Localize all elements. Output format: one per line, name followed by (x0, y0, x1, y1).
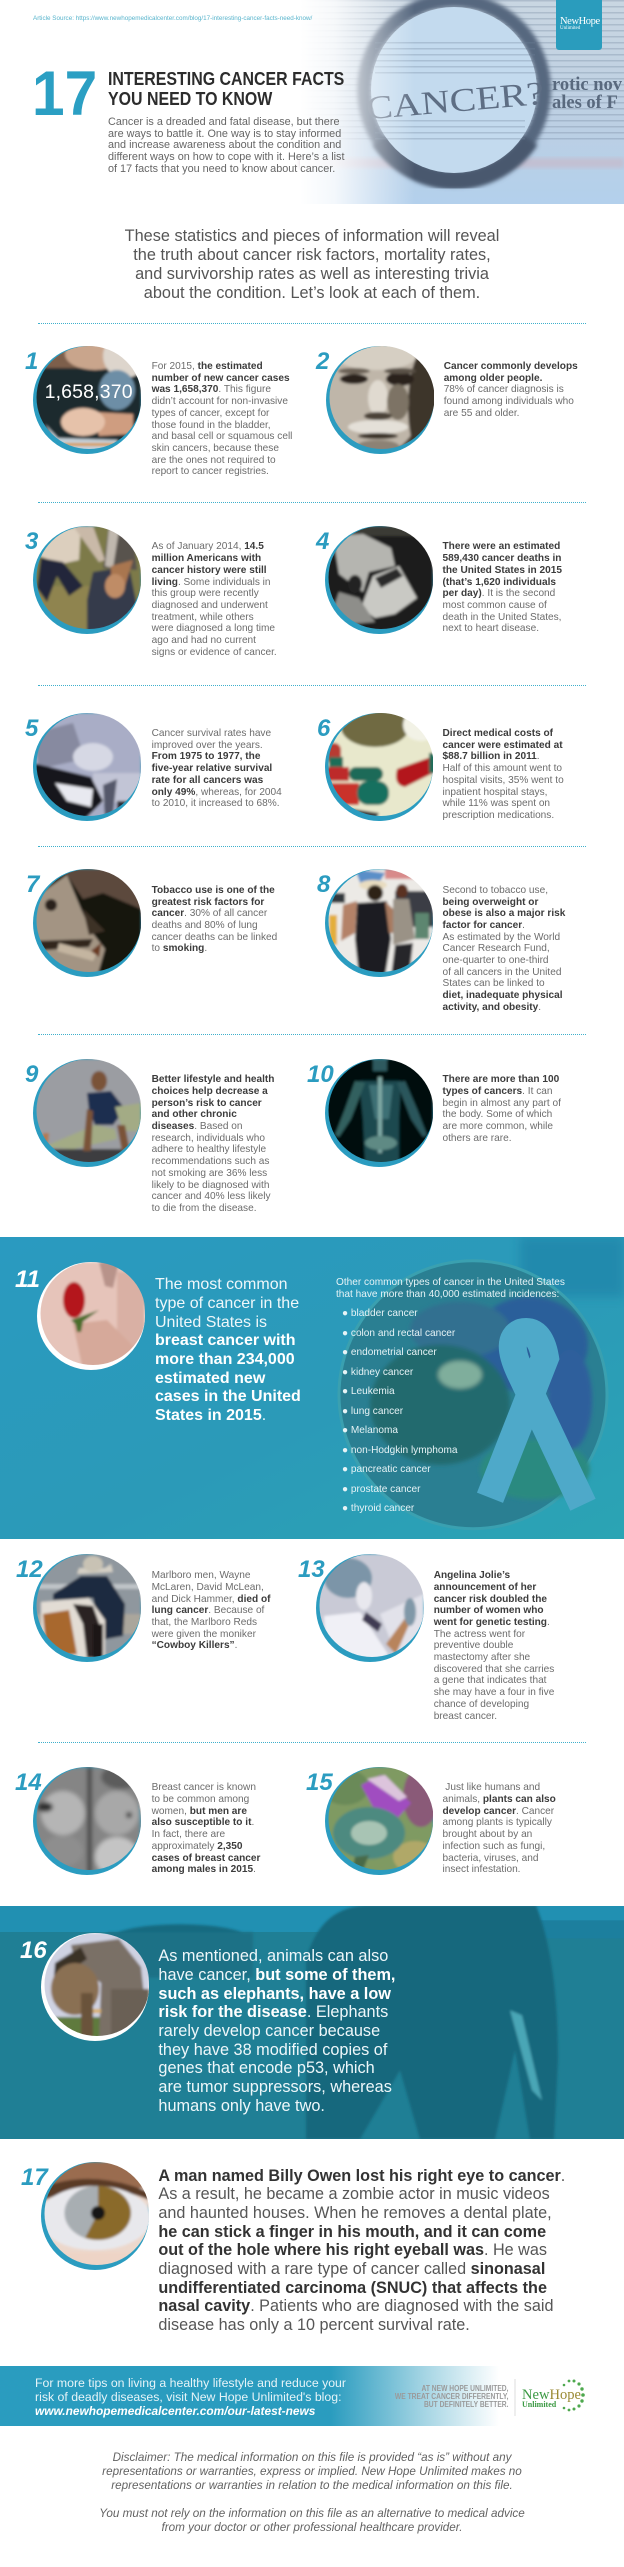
text 9: choices help decrease a (152, 1086, 268, 1097)
text 16: As mentioned, animals can also (158, 1947, 388, 1965)
text 12: and Dick Hammer, died of (152, 1594, 271, 1604)
title: INTERESTING CANCER FACTS (108, 69, 344, 89)
text 13: breast cancer. (434, 1711, 497, 1722)
number 9: 9 (25, 1061, 38, 1088)
number 13: 13 (298, 1556, 325, 1583)
text 5: From 1975 to 1977, the (152, 751, 260, 762)
text 12 (152, 1570, 271, 1651)
blog text (35, 2376, 346, 2418)
text 13: announcement of her (434, 1582, 536, 1593)
text 14: approximately 2,350 (152, 1841, 242, 1852)
photo: rose (37, 1262, 145, 1370)
text 6 (442, 728, 564, 821)
text 1: are the ones not required to (152, 455, 276, 466)
text 11: more than 234,000 (155, 1351, 295, 1368)
separator and logo (514, 2379, 585, 2416)
text 4: 589,430 cancer deaths in (442, 553, 561, 564)
text 4: most common cause of (442, 600, 547, 611)
list intro: Other common types of cancer in the United States (336, 1277, 565, 1288)
text 13: went for genetic testing. (434, 1617, 550, 1628)
text 13: discovered that she carries (434, 1664, 554, 1675)
text 4: There were an estimated (442, 541, 560, 552)
text 9: Better lifestyle and health (152, 1074, 274, 1085)
text 3 (152, 541, 277, 658)
fact 13 (298, 1554, 554, 1722)
text 16: have cancer, but some of them, (158, 1966, 395, 1984)
text 2: are 55 and older. (444, 408, 519, 419)
text 8: one-quarter to one-third (442, 955, 549, 966)
banner background with ribbon (0, 1237, 624, 1539)
text 15: animals, plants can also (442, 1794, 556, 1805)
text 14: cases of breast cancer (152, 1853, 260, 1864)
number 7: 7 (26, 871, 39, 898)
lead paragraph: and survivorship rates as well as interesting trivia (135, 265, 489, 283)
text 12: that, the Marlboro Reds (152, 1617, 257, 1628)
lead paragraph: about the condition. Let’s look at each of them. (144, 284, 480, 302)
photo: skeleton (325, 1059, 433, 1167)
text 8: Second to tobacco use, (442, 885, 548, 896)
text 16: such as elephants, have a low (158, 1985, 391, 2003)
text 17 (158, 2167, 565, 2334)
text 15: Just like humans and (445, 1782, 540, 1793)
fact 12 (16, 1554, 271, 1662)
intro text: Cancer is a dreaded and fatal disease, but there (108, 116, 339, 128)
text 7: deaths and 80% of lung (152, 920, 258, 931)
text 2: Cancer commonly develops (444, 361, 578, 372)
text 15: among plants is typically (442, 1817, 552, 1828)
tagline: AT NEW HOPE UNLIMITED, (421, 2383, 508, 2393)
disclaimer: You must not rely on the information on this file as an alternative to medical advice (99, 2507, 525, 2520)
disclaimer: Disclaimer: The medical information on this file is provided “as is” without any (113, 2451, 511, 2464)
text 8: of all cancers in the United (442, 967, 561, 978)
text 1: For 2015, the estimated (152, 361, 263, 372)
text 15 (442, 1782, 556, 1875)
number 8: 8 (317, 871, 330, 898)
text 1: didn’t account for non-invasive (152, 396, 288, 407)
lead paragraph: the truth about cancer risk factors, mortality rates, (133, 246, 491, 264)
header: magnifying glass photo: ales of F (552, 93, 618, 113)
big number 17: 17 (32, 59, 97, 129)
text 2: 78% of cancer diagnosis is (444, 384, 564, 395)
list of cancers: ● Leukemia (342, 1386, 395, 1397)
photo: people walking (325, 869, 433, 977)
text 7: Tobacco use is one of the (152, 885, 275, 896)
text 13: Angelina Jolie’s (434, 1570, 510, 1581)
text 14: to be common among (152, 1794, 249, 1805)
text 11: type of cancer in the (155, 1295, 299, 1312)
header: magnifying glass photo: CANCER? (365, 76, 545, 127)
text 12: were given the moniker (152, 1629, 256, 1640)
fact 4 (316, 526, 562, 634)
text 15: bacteria, viruses, and (442, 1853, 538, 1864)
blog text: For more tips on living a healthy lifestyle and reduce your (35, 2376, 346, 2390)
text 10: There are more than 100 (442, 1074, 559, 1085)
photo: wheelchair (33, 713, 141, 821)
text 6: cancer were estimated at (442, 740, 563, 751)
text 14: In fact, there are (152, 1829, 225, 1840)
text 6: prescription medications. (442, 810, 554, 821)
text 13: mastectomy after she (434, 1652, 530, 1663)
separator and logo: NewHope (522, 2387, 581, 2403)
text 13: cancer risk doubled the (434, 1594, 547, 1604)
text 2: among older people. (444, 373, 542, 384)
text 9: adhere to healthy lifestyle (152, 1144, 266, 1155)
photo: cowboy (33, 1554, 141, 1662)
text 6: inpatient hospital stays, (442, 787, 547, 798)
text 11: estimated new (155, 1370, 265, 1387)
text 12: lung cancer. Because of (152, 1605, 264, 1616)
text 1: report to cancer registries. (152, 466, 269, 477)
text 17: undifferentiated carcinoma (SNUC) that affects the (158, 2279, 547, 2297)
text 17: disease has only a 10 percent survival rate. (158, 2316, 470, 2334)
text 6: $88.7 billion in 2011. (442, 751, 540, 762)
number 14: 14 (15, 1769, 42, 1796)
text 1: skin cancers, because these (152, 443, 279, 454)
text 8: As estimated by the World (442, 932, 560, 943)
text 3: million Americans with (152, 553, 261, 564)
text 16: humans only have two. (158, 2097, 325, 2115)
photo: male chest (33, 1767, 141, 1875)
text 13: chance of developing (434, 1699, 529, 1710)
text 15: infection such as fungi, (442, 1841, 545, 1852)
fact 14 (15, 1767, 260, 1875)
list of cancers: ● prostate cancer (342, 1484, 420, 1495)
text 14: women, but men are (152, 1806, 247, 1817)
panel: fact 16 banner (0, 1906, 624, 2139)
text 9: to die from the disease. (152, 1203, 257, 1214)
text 3: signs or evidence of cancer. (152, 647, 277, 658)
text 9: diseases. Based on (152, 1121, 243, 1132)
text 16: genes that encode p53, which (158, 2059, 375, 2077)
text 7: to smoking. (152, 943, 207, 954)
text 16: are tumor suppressors, whereas (158, 2078, 392, 2096)
photo: old man (326, 346, 434, 454)
text 14: also susceptible to it. (152, 1817, 254, 1828)
tagline: WE TREAT CANCER DIFFERENTLY, (395, 2391, 508, 2401)
text 16: they have 38 modified copies of (158, 2041, 387, 2059)
disclaimer (99, 2451, 525, 2534)
text 14: Breast cancer is known (152, 1782, 256, 1793)
number 17 small: 17 (21, 2164, 48, 2191)
text 4: per day). It is the second (442, 588, 555, 599)
number 2: 2 (316, 348, 329, 375)
photo: pills (325, 713, 433, 821)
text 8: factor for cancer. (442, 920, 525, 931)
list of cancers: ● Melanoma (342, 1425, 398, 1436)
text 9: research, individuals who (152, 1133, 265, 1144)
list of cancers: ● kidney cancer (342, 1367, 413, 1378)
text 5: five-year relative survival (152, 763, 272, 774)
list intro (336, 1277, 565, 1300)
list of cancers: ● endometrial cancer (342, 1347, 437, 1358)
number 15: 15 (306, 1769, 333, 1796)
text 1: those found in the bladder, (152, 420, 271, 431)
list of cancers: ● thyroid cancer (342, 1503, 414, 1514)
separator and logo: Unlimited (522, 2400, 557, 2409)
text 10: others are rare. (442, 1133, 512, 1144)
text 17: out of the hole where his right eyeball was. He was (158, 2241, 547, 2259)
photo: man stretching (33, 1059, 141, 1167)
text 8: obese is also a major risk (442, 908, 565, 919)
text 17: and haunted houses. When he removes a dental plate, (158, 2204, 552, 2222)
text 9: and other chronic (152, 1109, 237, 1120)
text 1: number of new cancer cases (152, 373, 290, 384)
text 10: begin in almost any part of (442, 1098, 561, 1109)
text 7: cancer deaths can be linked (152, 932, 277, 943)
text 4 (442, 541, 562, 634)
lead paragraph: These statistics and pieces of information will reveal (125, 227, 499, 245)
text 10: the body. Some of which (442, 1109, 552, 1120)
text 1: was 1,658,370. This figure (152, 384, 271, 395)
text 8: Cancer Research Fund, (442, 943, 550, 954)
fact 1 (25, 346, 292, 477)
list of cancers: ● lung cancer (342, 1406, 403, 1417)
text 3: diagnosed and underwent (152, 600, 268, 611)
text 17: As a result, he became a zombie actor in music videos (158, 2185, 550, 2203)
list of cancers: ● pancreatic cancer (342, 1464, 431, 1475)
text 11: The most common (155, 1276, 287, 1293)
text 6: Half of this amount went to (442, 763, 562, 774)
text 1 (152, 361, 292, 477)
text 2 (444, 361, 578, 419)
number 12: 12 (16, 1556, 43, 1583)
fact 17 (21, 2162, 565, 2334)
number 11: 11 (15, 1266, 40, 1293)
disclaimer: representations or warranties in relation to the medical information on this file. (111, 2479, 513, 2492)
logo badge (556, 0, 602, 50)
photo: thistle (325, 1767, 433, 1875)
fact 7 (26, 869, 277, 977)
text 6: hospital visits, 35% went to (442, 775, 564, 786)
fact 3 (25, 526, 277, 658)
title (108, 69, 344, 109)
logo badge: Unlimited (560, 26, 580, 31)
text 17: nasal cavity. Patients who are diagnosed with the said (158, 2297, 553, 2315)
text 5: Cancer survival rates have (152, 728, 271, 739)
text 3: living. Some individuals in (152, 576, 271, 588)
number 1: 1 (25, 348, 38, 375)
intro text: and increase awareness about the condition and (108, 139, 341, 151)
intro text: of 17 facts that you need to know about cancer. (108, 163, 335, 175)
photo: eye (41, 2162, 149, 2270)
text 11: United States is (155, 1314, 267, 1331)
text 3: cancer history were still (152, 565, 267, 576)
intro text: are ways to battle it. One way is to stay informed (108, 128, 341, 140)
lead paragraph (125, 227, 499, 302)
blog text: risk of deadly diseases, visit New Hope Unlimited's blog: (35, 2390, 342, 2404)
fact 10 (307, 1059, 561, 1167)
text 13: she may have a four in five (434, 1687, 554, 1698)
list of cancers (342, 1308, 458, 1514)
fact 2 (316, 346, 578, 454)
text 12: Marlboro men, Wayne (152, 1570, 251, 1581)
text 7: cancer. 30% of all cancer (152, 908, 267, 919)
text 11: States in 2015. (155, 1407, 266, 1424)
text 4: next to heart disease. (442, 623, 539, 634)
title: YOU NEED TO KNOW (108, 89, 272, 109)
call to action bar (0, 2366, 585, 2426)
number 6: 6 (317, 715, 330, 742)
text 17: A man named Billy Owen lost his right eye to cancer. (158, 2167, 565, 2185)
list intro: that have more than 40,000 estimated incidences: (336, 1289, 559, 1300)
text 9 (152, 1074, 274, 1214)
text 4: death in the United States, (442, 612, 561, 623)
text 5: only 49%, whereas, for 2004 (152, 787, 282, 798)
fact 15 (306, 1767, 556, 1875)
disclaimer: representations or warranties, express or implied. New Hope Unlimited makes no (102, 2465, 522, 2478)
text 6: while 11% was spent on (442, 798, 550, 809)
text 4: (that’s 1,620 individuals (442, 576, 556, 588)
text 9: recommendations such as (152, 1156, 269, 1167)
number 10: 10 (307, 1061, 334, 1088)
text 8: activity, and obesity. (442, 1002, 541, 1013)
text 13: a gene that indicates that (434, 1675, 546, 1686)
list of cancers: ● colon and rectal cancer (342, 1328, 455, 1339)
text 7: greatest risk factors for (152, 896, 264, 908)
list of cancers: ● non-Hodgkin lymphoma (342, 1445, 458, 1456)
text 3: As of January 2014, 14.5 (152, 541, 264, 552)
text 1: and basal cell or squamous cell (152, 431, 292, 442)
text 16 (158, 1947, 395, 2115)
panel: fact 11 banner (0, 1237, 624, 1539)
photo: elephants (41, 1933, 149, 2041)
text 11: cases in the United (155, 1388, 301, 1405)
text 17: he can stick a finger in his mouth, and it can come (158, 2223, 546, 2241)
text 9: likely to be diagnosed with (152, 1180, 269, 1191)
text 9: cancer and 40% less likely (152, 1191, 271, 1202)
number 5: 5 (25, 715, 38, 742)
text 14 (152, 1782, 260, 1875)
text 4: the United States in 2015 (442, 565, 562, 576)
text 10 (442, 1074, 561, 1144)
header: magnifying glass photo (298, 0, 624, 204)
text 5 (152, 728, 282, 809)
article source: Article Source: https://www.newhopemedicalcenter.com/blog/17-interesting-cancer-facts-need-know/ (33, 15, 312, 22)
text 15: develop cancer. Cancer (442, 1806, 554, 1817)
tagline (394, 2383, 508, 2409)
text 3: this group were recently (152, 588, 259, 599)
text 5: rate for all cancers was (152, 775, 263, 786)
text 9: not smoking are 36% less (152, 1168, 267, 1179)
disclaimer: from your doctor or other professional healthcare provider. (162, 2521, 462, 2534)
text 1: types of cancer, except for (152, 408, 269, 419)
text 12: “Cowboy Killers”. (152, 1640, 237, 1651)
text 5: improved over the years. (152, 740, 263, 751)
text 6: Direct medical costs of (442, 728, 553, 739)
fact 5 (25, 713, 282, 821)
fact 8 (317, 869, 566, 1013)
text 15: insect infestation. (442, 1864, 520, 1875)
text 13: number of women who (434, 1605, 544, 1616)
text 8: States can be linked to (442, 978, 545, 989)
text 2: found among individuals who (444, 396, 574, 407)
text 13: The actress went for (434, 1629, 525, 1640)
number 4: 4 (316, 528, 329, 555)
text 16: rarely develop cancer because (158, 2022, 380, 2040)
fact 9 (25, 1059, 274, 1214)
text 3: were diagnosed a long time (152, 623, 275, 634)
text 8: being overweight or (442, 896, 538, 908)
text 13 (434, 1570, 554, 1722)
intro text: different ways on how to cope with it. Here’s a list (108, 151, 344, 163)
text 12: McLaren, David McLean, (152, 1582, 264, 1593)
list of cancers: ● bladder cancer (342, 1308, 418, 1319)
text 15: brought about by an (442, 1829, 532, 1840)
text 17: diagnosed with a rare type of cancer called sinonasal (158, 2260, 545, 2278)
text 10: types of cancers. It can (442, 1086, 552, 1097)
text 3: ago and had no current (152, 635, 256, 646)
text 11: breast cancer with (155, 1332, 296, 1349)
text 5: to 2010, it increased to 68%. (152, 798, 280, 809)
photo: skull (325, 526, 433, 634)
text 8: diet, inadequate physical (442, 990, 563, 1001)
photo: couple walking (33, 526, 141, 634)
text 10: are more common, while (442, 1121, 553, 1132)
text 16: risk for the disease. Elephants (158, 2003, 388, 2021)
intro text (108, 116, 344, 175)
text 13: preventive double (434, 1640, 513, 1651)
text 11 (155, 1276, 301, 1424)
text 8 (442, 885, 566, 1013)
banner background: elephants (0, 1906, 624, 2139)
photo: smoking skull (33, 869, 141, 977)
text 3: treatment, while others (152, 612, 254, 623)
blog text: www.newhopemedicalcenter.com/our-latest-news (35, 2404, 315, 2418)
photo: laptop with number (33, 346, 141, 454)
bar background (0, 2366, 492, 2426)
header: magnifying glass photo: rotic nov (552, 75, 623, 95)
number 16: 16 (20, 1937, 47, 1964)
tagline: BUT DEFINITELY BETTER. (424, 2399, 508, 2409)
text 9: person’s risk to cancer (152, 1098, 262, 1109)
photo: nurse (316, 1554, 424, 1662)
photo: laptop with number: 1,658,370 (45, 381, 133, 403)
fact 6 (317, 713, 564, 821)
logo badge: NewHope (560, 16, 600, 27)
text 14: among males in 2015. (152, 1864, 256, 1875)
number 3: 3 (25, 528, 38, 555)
text 7 (152, 885, 277, 954)
